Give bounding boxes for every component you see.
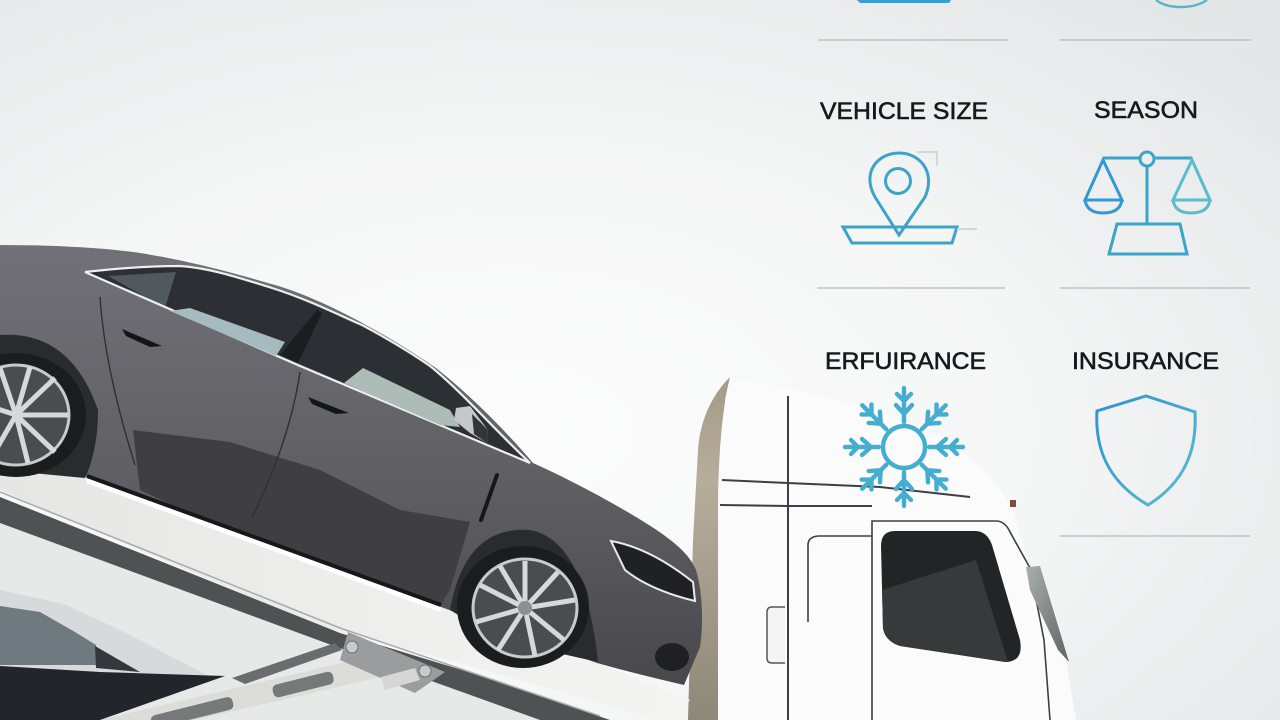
front rim: [473, 559, 577, 657]
arm slots: [271, 671, 335, 698]
rear tyre: [0, 353, 86, 477]
door lines: [100, 297, 300, 518]
front wheel arch: [450, 530, 598, 662]
black sill line: [87, 476, 441, 605]
window glass highlights: [170, 308, 285, 356]
side mirror: [454, 406, 488, 443]
heading: vehicle size: VEHICLE SIZE: [820, 98, 988, 125]
fog lamp: [655, 643, 689, 671]
B-pillar: [280, 310, 322, 363]
hinge bracket: [340, 632, 445, 693]
front tyre: [457, 546, 589, 668]
icon: location pin on base: [843, 152, 977, 243]
window reflection: [882, 560, 1008, 662]
icon: shield: [1097, 396, 1195, 505]
ramp beam highlight: [0, 492, 600, 716]
headlight: [611, 541, 695, 601]
hinge bolts: [346, 641, 358, 653]
side mirror: [1026, 566, 1069, 662]
ramp rail highlight: [87, 480, 441, 609]
ramp deck: [0, 457, 690, 720]
cab body: [718, 377, 1076, 720]
icon: snowflake: [845, 388, 963, 506]
cab panel lines: [720, 396, 970, 720]
icon: balance scale: [1085, 152, 1210, 254]
factor: vehicle size: [820, 98, 988, 243]
factor: season: [1085, 97, 1210, 254]
rear rim: [0, 365, 69, 465]
top row icon fragments: [857, 0, 1207, 7]
heading: erfuirance: ERFUIRANCE: [825, 348, 986, 375]
rear quarter window tint: [108, 272, 176, 308]
divider rules: [817, 40, 1251, 536]
icon fragment: left: [857, 0, 951, 3]
door handles: [122, 329, 162, 347]
fuel slot: [481, 475, 497, 520]
lower car roof and window: [0, 590, 207, 700]
truck rear column: [688, 377, 730, 720]
cab window: [881, 531, 1021, 662]
ramp dark beam: [0, 497, 610, 720]
heading: season: SEASON: [1094, 97, 1198, 124]
car body: [0, 245, 702, 685]
truck cab: [688, 377, 1076, 720]
icon fragment: right: [1156, 0, 1207, 7]
lower car body: [0, 666, 225, 720]
main grey sedan: [0, 245, 702, 685]
carrier ramp: [0, 457, 690, 720]
marker light: [1010, 500, 1016, 507]
support arm: [100, 657, 381, 720]
rear wheel arch: [0, 335, 98, 478]
lower car on carrier: [0, 590, 225, 720]
factor: insurance: [1072, 348, 1219, 505]
area beneath ramp: [0, 523, 540, 720]
factor: garbled insurance label with snowflake: [825, 348, 986, 506]
door handle recess: [767, 607, 785, 663]
lower door reflection: [133, 430, 470, 604]
chrome window trim: [85, 266, 530, 463]
side windows: [85, 266, 530, 463]
heading: insurance: INSURANCE: [1072, 348, 1219, 375]
